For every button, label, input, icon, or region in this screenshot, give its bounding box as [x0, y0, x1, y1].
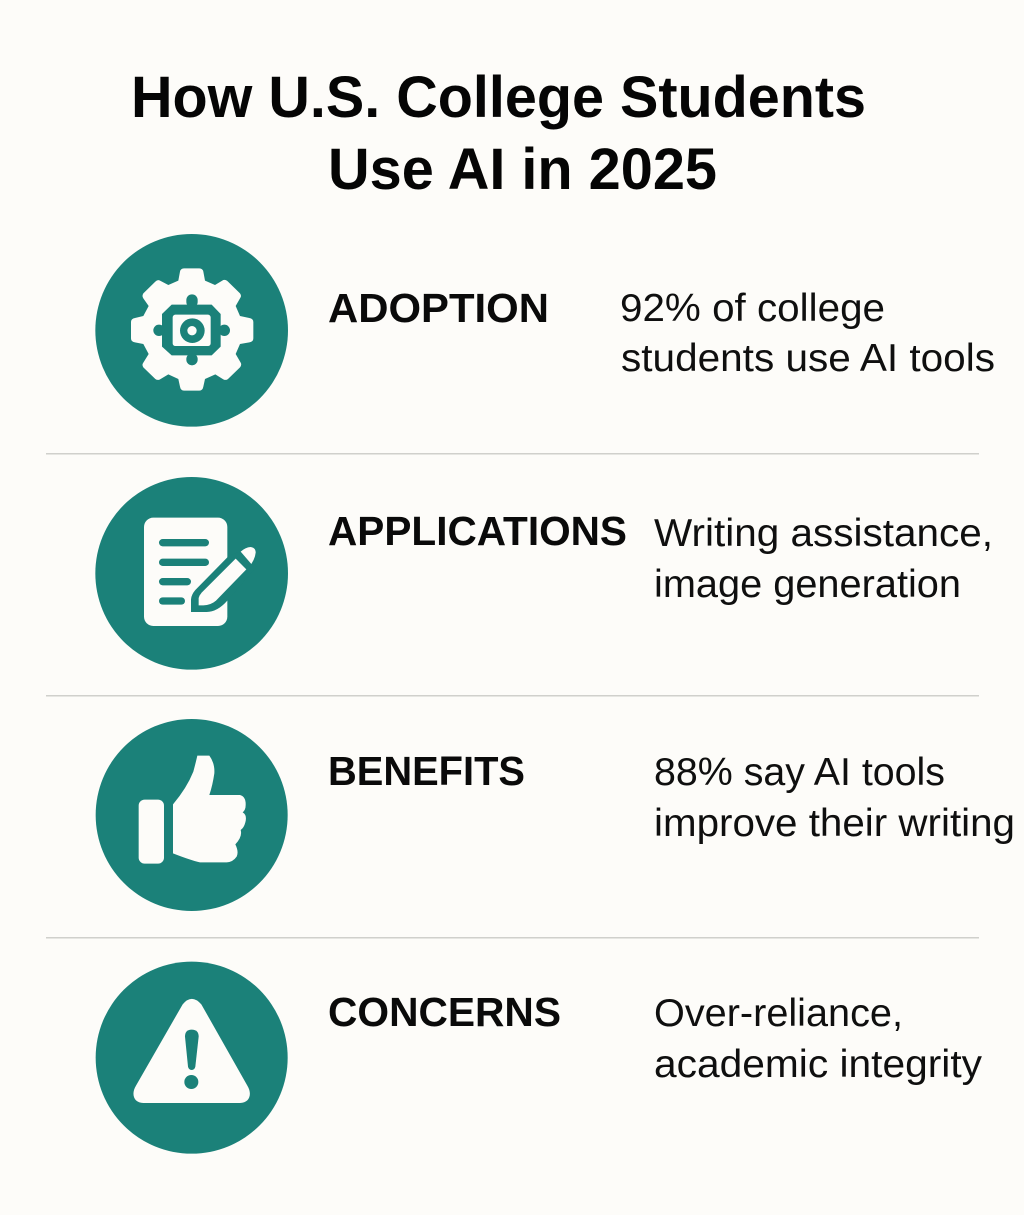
text: adoption detail: 92% of college [620, 287, 885, 330]
title [131, 65, 866, 202]
panel: concerns [96, 962, 983, 1154]
text: concerns detail: Over-reliance, [654, 992, 903, 1035]
text: applications detail [654, 512, 993, 606]
text: applications detail: image generation [654, 563, 961, 606]
icon: warning triangle [96, 962, 288, 1154]
heading: benefits: BENEFITS [328, 748, 525, 794]
text: benefits detail [654, 751, 1015, 845]
panel: applications [95, 477, 993, 670]
icon: gear with chip [95, 234, 288, 427]
text: benefits detail: improve their writing [654, 802, 1015, 845]
text: concerns detail: academic integrity [654, 1043, 983, 1086]
text: adoption detail [620, 287, 995, 380]
heading: adoption: ADOPTION [328, 285, 549, 331]
text: applications detail: Writing assistance, [654, 512, 993, 555]
heading: concerns: CONCERNS [328, 989, 561, 1035]
text: concerns detail [654, 992, 983, 1086]
title: Use AI in 2025 [328, 137, 717, 202]
heading: applications: APPLICATIONS [328, 508, 627, 554]
text: adoption detail: students use AI tools [621, 337, 995, 380]
text: benefits detail: 88% say AI tools [654, 751, 945, 794]
panel: benefits [96, 719, 1015, 911]
panel: adoption [95, 234, 995, 427]
icon: thumbs up [96, 719, 288, 911]
title: How U.S. College Students [131, 65, 866, 130]
icon: document with pencil [95, 477, 288, 670]
